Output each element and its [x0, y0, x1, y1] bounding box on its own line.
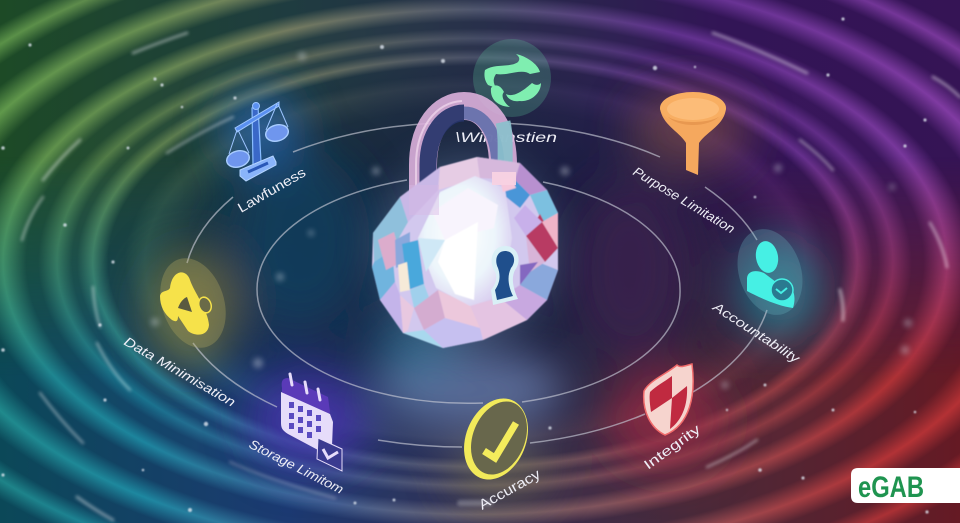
icon: recycling arrows [473, 39, 551, 117]
label: storage limitom: Storage Limitom [247, 436, 346, 497]
padlock shackle back [416, 101, 505, 215]
orbit rings [187, 123, 767, 447]
soft glow particles [151, 52, 912, 388]
icon: data minimisation cloud [149, 250, 237, 356]
icon: accuracy check badge [452, 389, 540, 489]
keyhole [491, 246, 519, 305]
icon: accountability person [727, 221, 813, 323]
label: accuracy: Accuracy [476, 466, 543, 513]
label: data minimisation: Data Minimisation [122, 334, 238, 410]
label: integrity: Integrity [641, 421, 703, 472]
logo: eGAB: eGAB [858, 471, 924, 504]
shackle front foot [409, 172, 516, 215]
label: lawfulness: Lawfuness [235, 164, 309, 216]
icon: padlock [372, 101, 558, 348]
label: purpose limitation: Purpose Limitation [630, 164, 738, 236]
icon: calendar [281, 374, 342, 471]
icon: scales of justice [225, 102, 290, 181]
label: accountability: Accountability [709, 298, 804, 367]
label: top principle: \Winanstien [455, 129, 557, 145]
padlock body [372, 157, 558, 348]
icon: shield [644, 364, 693, 435]
icon: funnel [660, 92, 726, 175]
